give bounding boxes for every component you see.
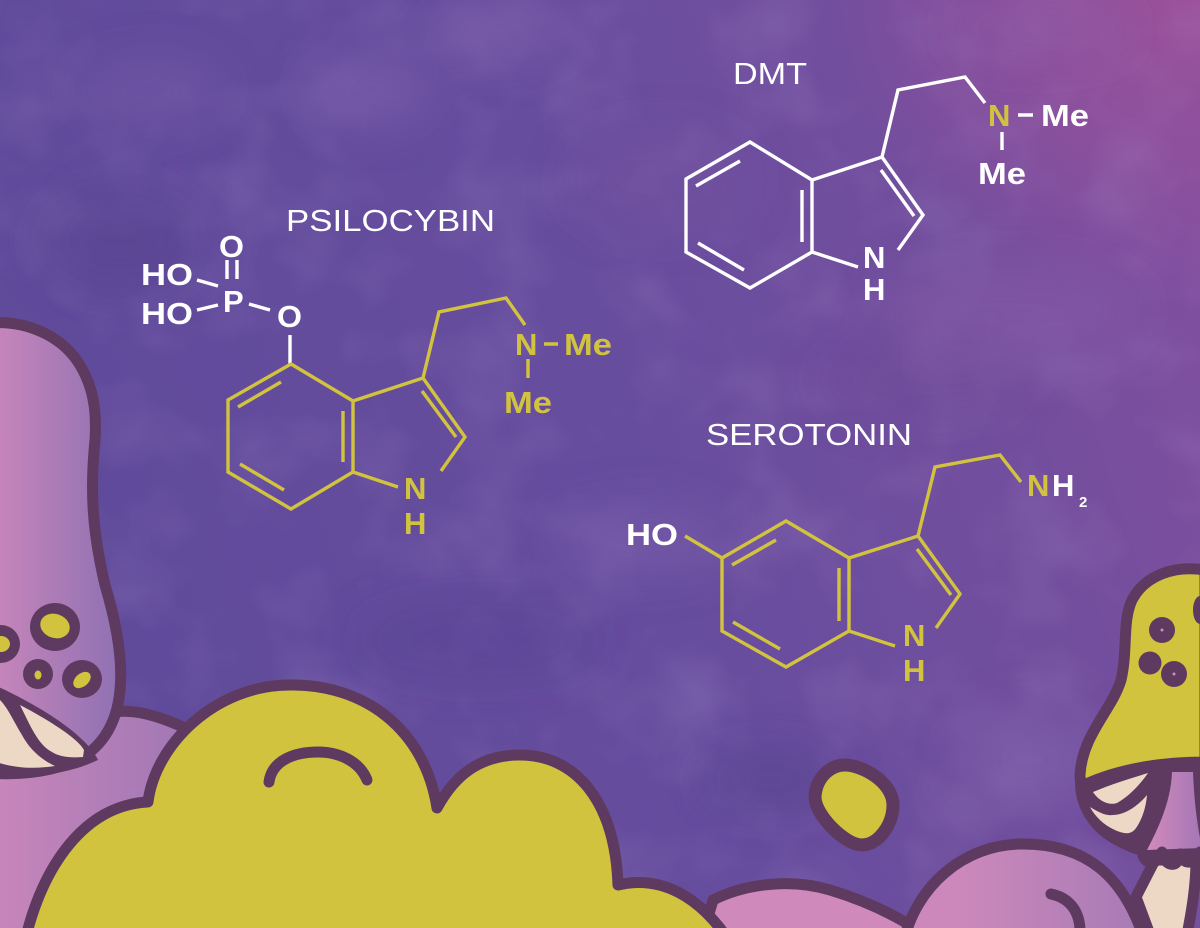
phosphate group: O	[277, 299, 302, 334]
amine group: H	[404, 506, 426, 541]
molecule: psilocybin	[141, 203, 612, 541]
curl on pink blob	[1051, 894, 1080, 928]
amine group: N	[404, 471, 426, 506]
amine and hydroxyl groups: H	[903, 653, 925, 688]
amine group: N	[863, 240, 885, 275]
molecule: DMT	[686, 56, 1089, 307]
amine and hydroxyl groups: HO	[626, 517, 678, 552]
amine group	[863, 98, 1089, 307]
indole ring	[685, 455, 1021, 667]
illustration: right mushroom	[1080, 569, 1200, 928]
phosphate group: HO	[141, 257, 193, 292]
spots, right	[1138, 596, 1200, 687]
phosphate group: P	[223, 284, 244, 319]
heading: serotonin: SEROTONIN	[706, 417, 912, 452]
amine group: Me	[564, 327, 612, 362]
indole ring	[686, 77, 985, 288]
amine and hydroxyl groups: 2	[1079, 494, 1087, 511]
amine group: Me	[504, 385, 552, 420]
phosphate group: HO	[141, 296, 193, 331]
stem upper	[1147, 772, 1200, 850]
gills, left	[0, 683, 98, 777]
indole ring	[228, 298, 525, 509]
phosphate group: O	[219, 229, 244, 264]
amine group: Me	[978, 156, 1026, 191]
mushroom cap, left	[0, 323, 121, 774]
amine group: N	[515, 327, 537, 362]
stem lower	[1136, 860, 1196, 928]
heading: psilocybin: PSILOCYBIN	[286, 203, 495, 238]
gills, right	[1093, 773, 1148, 804]
amine group: H	[863, 272, 885, 307]
back blob, left	[0, 711, 200, 928]
frill	[1143, 852, 1200, 864]
illustration: bottom-right pink blob	[700, 844, 1146, 928]
molecule: serotonin	[626, 417, 1087, 688]
heading: DMT: DMT	[733, 56, 807, 91]
amine and hydroxyl groups: N	[1027, 468, 1049, 503]
illustration: yellow cloud	[24, 685, 732, 928]
amine and hydroxyl groups: N	[903, 618, 925, 653]
amine and hydroxyl groups: H	[1052, 468, 1074, 503]
illustration: left mushroom and back blob	[0, 323, 200, 928]
phosphate group	[141, 229, 302, 364]
gill underside	[1081, 760, 1200, 855]
cloud smile	[269, 752, 367, 782]
spots, left	[0, 603, 102, 698]
amine group: Me	[1041, 98, 1089, 133]
amine group: N	[988, 98, 1010, 133]
yellow pebble	[815, 765, 893, 845]
amine and hydroxyl groups	[626, 468, 1087, 688]
mushroom cap, right	[1080, 569, 1200, 785]
amine group	[404, 327, 612, 541]
